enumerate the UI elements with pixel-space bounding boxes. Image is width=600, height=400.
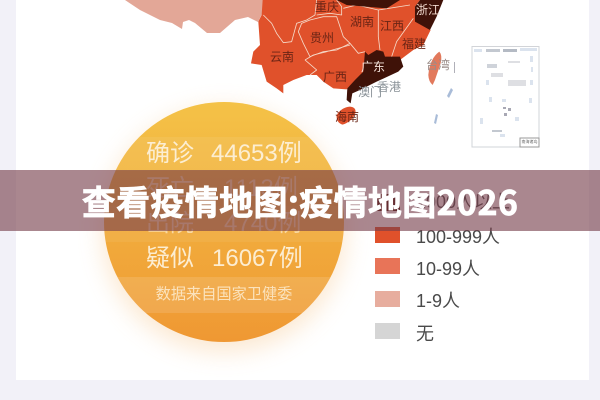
province: Hubei dark <box>337 0 400 8</box>
province: Hainan <box>337 107 356 125</box>
province labels: 海南 <box>335 109 359 124</box>
map of China, southern part <box>125 0 539 147</box>
province: Guangdong dark <box>347 50 403 103</box>
stats text: 确诊 <box>146 140 194 167</box>
province labels: 贵州 <box>310 31 334 45</box>
legend <box>375 192 510 344</box>
stats text <box>146 140 303 272</box>
legend item: 100-999: 100-999人 <box>416 227 500 247</box>
province labels: 福建 <box>402 36 426 51</box>
province labels: 香港 <box>377 80 401 94</box>
legend item: 10-99 <box>375 258 480 279</box>
stats text: 疑似 <box>146 245 194 272</box>
province labels: 广东 <box>361 60 385 74</box>
title banner <box>0 170 600 231</box>
legend item: 1-9: 1-9人 <box>416 291 460 311</box>
province labels: 澳门 <box>358 84 382 99</box>
stats text: 死亡 <box>146 175 194 202</box>
province labels: 重庆 <box>315 0 339 14</box>
legend item: none: 无 <box>416 324 434 344</box>
province labels: 台湾 <box>426 57 450 72</box>
legend item: 10-99: 10-99人 <box>416 259 480 279</box>
southern provinces silhouette <box>251 0 431 93</box>
data source note: 数据来自国家卫健委 <box>156 286 292 303</box>
inset map: South China Sea <box>472 46 539 147</box>
province labels: 湖南 <box>350 14 374 29</box>
province borders <box>263 0 413 75</box>
province labels: 浙江 <box>416 3 440 17</box>
inset label box: 南海诸岛 <box>522 138 538 144</box>
region: Tibet pink <box>125 0 264 33</box>
province labels <box>270 0 450 124</box>
stats circle <box>100 102 350 342</box>
legend item: none <box>375 323 434 344</box>
stats text: 16067例 <box>212 245 303 272</box>
legend item: 100-999 <box>375 227 500 247</box>
province labels: 云南 <box>270 49 294 64</box>
province: Taiwan <box>428 52 441 85</box>
province labels: 江西 <box>380 19 404 33</box>
sea islands <box>434 62 455 124</box>
legend item: 1-9 <box>375 291 460 311</box>
stats text: 出院 <box>146 210 194 237</box>
legend item: 1000+ <box>375 192 510 212</box>
stats text: 1113例 <box>224 175 298 202</box>
legend item: 1000+: 1000人以上 <box>416 192 510 212</box>
circle shadow <box>102 108 346 352</box>
stats text: 4740例 <box>224 210 301 237</box>
province: Zhejiang dark <box>415 0 443 30</box>
title: 查看疫情地图:疫情地图2026 <box>82 176 518 225</box>
stats text: 44653例 <box>211 140 302 167</box>
province labels: 广西 <box>323 70 347 84</box>
